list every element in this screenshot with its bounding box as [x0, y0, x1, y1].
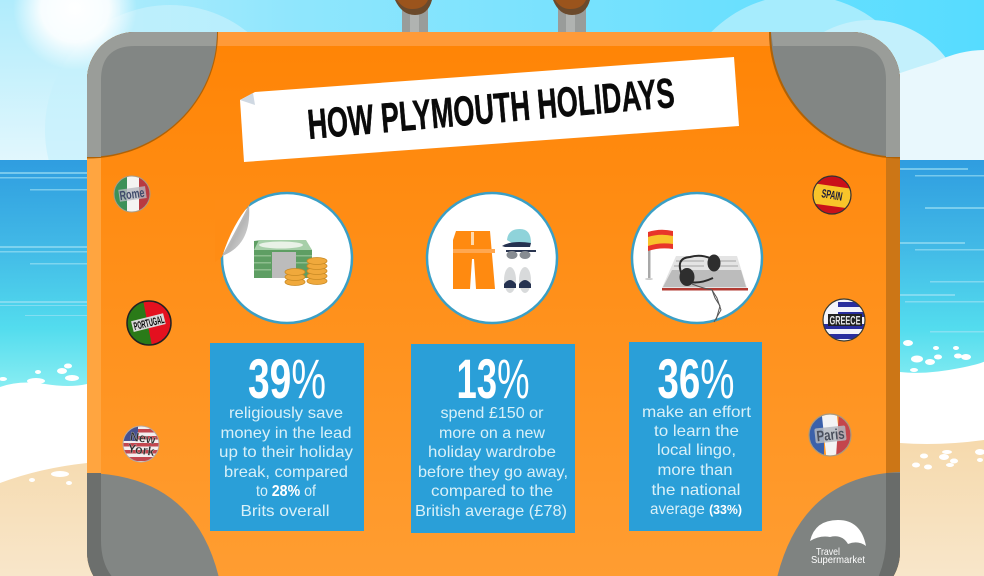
suitcase handle: [395, 0, 590, 33]
headphones: [680, 254, 721, 322]
sticker: Spain: [811, 175, 853, 215]
sticker: New York: New: [129, 429, 157, 447]
panel: 39% stat: money in the lead: [220, 425, 352, 442]
circle icon: language learning: [632, 193, 762, 323]
panel: 36% stat: to learn the: [654, 423, 739, 440]
circle icon: holiday clothes: [427, 193, 557, 323]
sticker: Rome: [114, 176, 151, 212]
suitcase corner: bottom right: [776, 472, 900, 576]
background: sea foam: [0, 340, 984, 485]
panel: 13% stat: spend £150 or: [440, 405, 544, 422]
swim shorts: [453, 231, 495, 289]
sticker: Portugal: PORTUGAL: [133, 314, 166, 333]
logo: Travel Supermarket: [810, 520, 866, 566]
panel: 39% stat: Brits overall: [240, 503, 330, 520]
suitcase corner: top left: [87, 32, 218, 158]
panel: 39% stat: 39%: [248, 347, 326, 410]
circle icon: money: [215, 193, 352, 323]
panel: 36% stat: the national: [652, 482, 740, 499]
panel: 13% stat: [411, 344, 575, 533]
logo: Travel Supermarket: Travel: [816, 546, 840, 558]
cap: [502, 229, 531, 247]
title label: [240, 57, 739, 162]
panel: 13% stat: 13%: [456, 347, 530, 410]
flip flops: [504, 267, 531, 293]
cash stack: [254, 240, 312, 278]
panel: 13% stat: more on a new: [439, 425, 545, 442]
sticker: Paris: Paris: [816, 426, 845, 445]
background: sand: [0, 400, 984, 576]
sticker: New York: York: [127, 441, 155, 459]
logo: Travel Supermarket: Supermarket: [811, 554, 865, 566]
panel: 13% stat: holiday wardrobe: [428, 444, 556, 461]
panel: 36% stat: make an effort: [642, 404, 752, 421]
background: sky with sun and clouds: [0, 0, 984, 255]
sticker: Greece: [822, 298, 868, 342]
sunglasses: [506, 250, 536, 259]
open book: [662, 256, 748, 290]
panel: 13% stat: British average (£78): [415, 503, 567, 520]
panel: 36% stat: 36%: [658, 347, 734, 410]
title text: HOW PLYMOUTH HOLIDAYS: [306, 69, 676, 148]
panel: 36% stat: average (33%): [650, 501, 742, 518]
sticker: Paris: [808, 412, 853, 458]
sticker: Spain: SPAIN: [820, 186, 844, 204]
panel: 39% stat: to 28% of: [256, 483, 316, 500]
panel: 13% stat: before they go away,: [418, 464, 568, 481]
page curl: [215, 200, 250, 262]
sticker: Greece: GREECE: [830, 316, 861, 328]
panel: 39% stat: [210, 343, 364, 531]
panel: 39% stat: up to their holiday: [219, 444, 353, 461]
suitcase corner: bottom left: [87, 473, 220, 576]
coins: [285, 258, 327, 286]
suitcase body: [87, 32, 900, 576]
panel: 36% stat: local lingo,: [657, 442, 736, 459]
sticker: Portugal: [126, 300, 172, 346]
flag: [645, 230, 673, 280]
panel: 13% stat: compared to the: [431, 483, 553, 500]
panel: 36% stat: [629, 342, 762, 531]
sticker: New York: [122, 426, 160, 462]
sticker: Rome: Rome: [119, 185, 145, 203]
panel: 36% stat: more than: [658, 462, 732, 479]
panel: 39% stat: religiously save: [229, 405, 343, 422]
background: sea: [0, 160, 984, 400]
panel: 39% stat: break, compared: [224, 464, 348, 481]
suitcase corner: top right: [769, 32, 900, 159]
